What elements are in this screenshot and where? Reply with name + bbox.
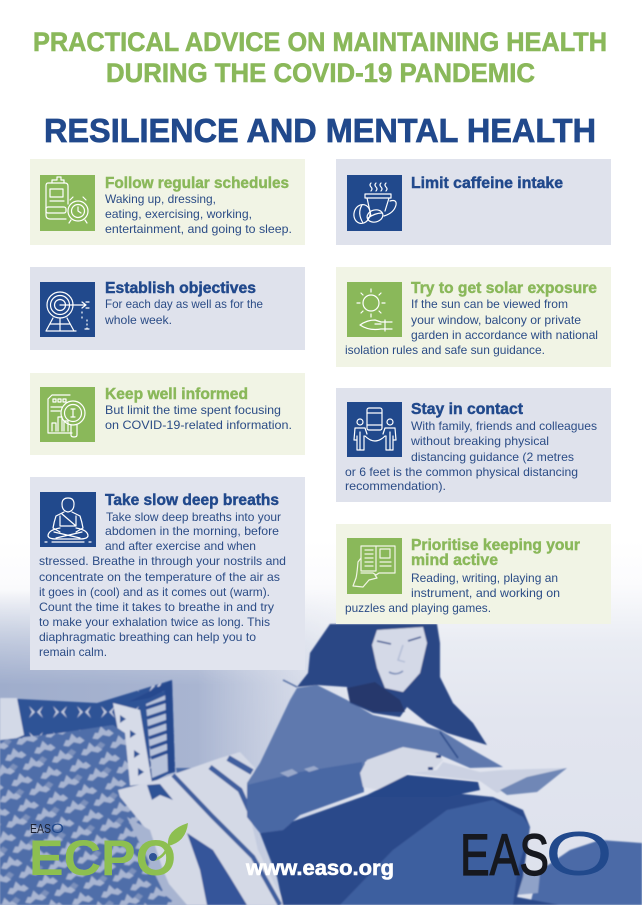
front patterned pillow: [0, 725, 175, 905]
website url: www.easo.org: [245, 857, 394, 880]
body text: or 6 feet is the common physical distancing: [345, 465, 578, 479]
body text: [105, 192, 292, 236]
body text: entertainment, and going to sleep.: [105, 222, 292, 236]
heading: [411, 537, 580, 569]
body text: instrument, and working on: [411, 586, 560, 600]
background photo: woman reading on sofa: [0, 592, 642, 905]
title: practical advice: PRACTICAL ADVICE ON MAINTAINING HEALTH: [33, 27, 607, 57]
body text: [105, 403, 292, 432]
body text: without breaking physical: [410, 434, 549, 448]
heading: Keep well informed: [105, 386, 248, 403]
body text: whole week.: [104, 313, 172, 327]
icon: clipboard and alarm clock: [40, 175, 95, 231]
body text: puzzles and playing games.: [345, 601, 491, 615]
heading: Take slow deep breaths: [105, 492, 279, 509]
body text: Take slow deep breaths into your: [106, 510, 281, 524]
woman: hair: [297, 624, 487, 745]
icon: two people and a phone: [347, 402, 402, 457]
body text: [39, 510, 286, 659]
icon: coffee cup and beans: [347, 175, 402, 231]
body text: Waking up, dressing,: [105, 192, 216, 206]
body text: and after exercise and when: [105, 539, 256, 553]
heading: Prioritise keeping your: [411, 537, 580, 554]
body text: it goes in (cool) and as it comes out (warm).: [39, 585, 270, 599]
icon: person meditating: [40, 492, 96, 547]
heading: Follow regular schedules: [105, 175, 289, 192]
body text: stressed. Breathe in through your nostrils and: [39, 554, 286, 568]
logo: EASO: O: [545, 820, 613, 889]
sofa: [530, 840, 642, 905]
panel: establish objectives: [30, 267, 305, 350]
back pillow: [0, 680, 175, 800]
title: practical advice: [33, 27, 607, 88]
heading: Stay in contact: [411, 401, 524, 418]
body text: recommendation).: [345, 479, 446, 493]
body text: distancing guidance (2 metres: [411, 450, 574, 464]
woman: legs and torso: [260, 793, 560, 905]
panel: take slow deep breaths: [30, 477, 305, 670]
heading: resilience and mental health: RESILIENCE AND MENTAL HEALTH: [44, 112, 596, 149]
icon: target with dart: [40, 282, 95, 337]
panel: follow regular schedules: [30, 159, 305, 245]
book: [363, 762, 567, 797]
logo: EASO ECPO: ECPO: [29, 830, 176, 886]
woman: hand: [360, 747, 443, 790]
panel: keep well informed: [30, 373, 305, 455]
body text: With family, friends and colleagues: [411, 419, 597, 433]
panel: try to get solar exposure: [336, 267, 611, 367]
woman: face: [372, 627, 427, 692]
icon: hand holding open book: [347, 538, 402, 594]
icon: sun over open hand: [347, 282, 402, 337]
heading: mind active: [411, 552, 498, 569]
title: practical advice: DURING THE COVID-19 PANDEMIC: [106, 58, 535, 88]
body text: garden in accordance with national: [411, 328, 598, 342]
logo: EASO ECPO: O: [51, 820, 64, 836]
panel: prioritise keeping your mind active: [336, 524, 611, 624]
body text: [104, 297, 263, 327]
heading: Limit caffeine intake: [411, 175, 563, 192]
striped pillow: [118, 752, 285, 905]
body text: [345, 419, 597, 493]
body text: [345, 297, 598, 357]
panel: limit caffeine intake: [336, 159, 611, 245]
body text: your window, balcony or private: [411, 313, 581, 327]
heading: Try to get solar exposure: [411, 280, 597, 297]
body text: isolation rules and safe sun guidance.: [345, 343, 545, 357]
icon: report with magnifier: [40, 387, 95, 442]
logo: EASO ECPO: EAS: [30, 821, 51, 836]
body text: Count the time it takes to breathe in and try: [39, 600, 274, 614]
body text: For each day as well as for the: [105, 297, 263, 311]
body text: to make your exhalation twice as long. This: [39, 615, 270, 629]
body text: Reading, writing, playing an: [411, 571, 558, 585]
body text: on COVID-19-related information.: [105, 418, 292, 432]
woman: jacket: [246, 684, 503, 786]
heading: Establish objectives: [105, 280, 256, 297]
body text: concentrate on the temperature of the air as: [39, 570, 280, 584]
body text: diaphragmatic breathing can help you to: [39, 630, 256, 644]
body text: remain calm.: [39, 645, 107, 659]
panel: stay in contact: [336, 388, 611, 502]
body text: But limit the time spent focusing: [105, 403, 281, 417]
body text: [345, 571, 560, 615]
body text: abdomen in the morning, before: [105, 524, 279, 538]
body text: eating, exercising, working,: [105, 207, 252, 221]
body text: If the sun can be viewed from: [411, 297, 568, 311]
logo: EASO: EAS: [460, 823, 549, 888]
